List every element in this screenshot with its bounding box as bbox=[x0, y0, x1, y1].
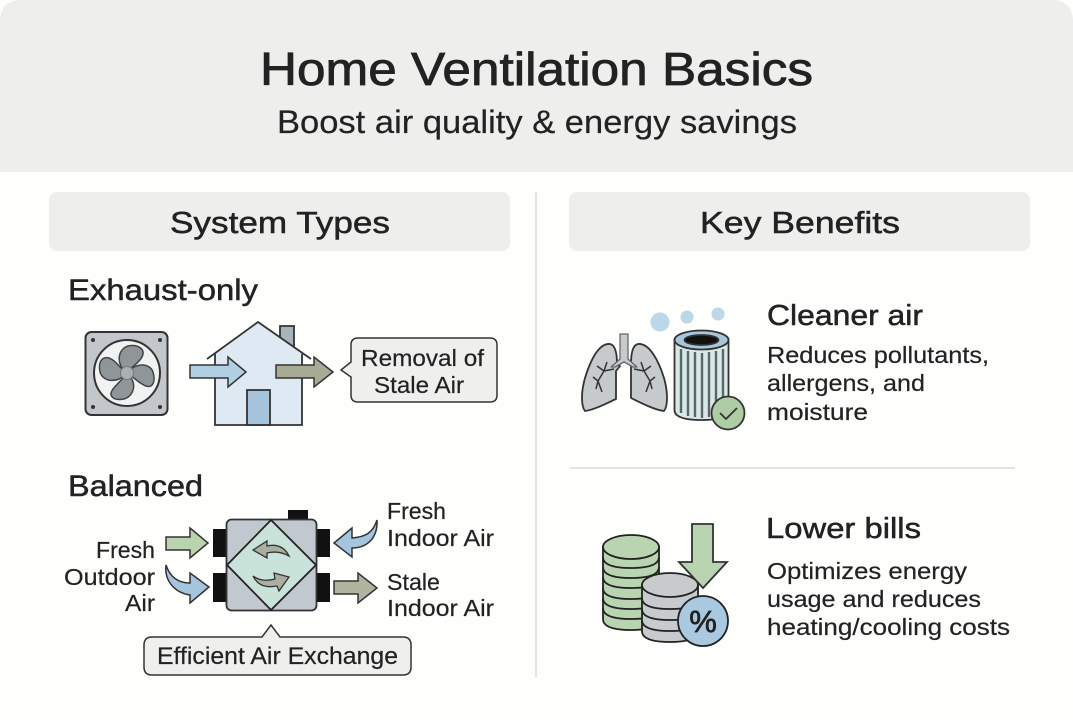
icon: grey coin stack bbox=[642, 573, 698, 642]
arrow: outdoor air curved bbox=[166, 565, 209, 603]
icon: house bbox=[207, 322, 311, 425]
text: lower bills: Lower bills bbox=[766, 513, 921, 545]
arrow: fresh indoor curved bbox=[334, 520, 377, 557]
heading: key benefits bbox=[569, 192, 1030, 251]
text: lower bills bbox=[766, 513, 1010, 640]
heading: system types bbox=[49, 192, 510, 251]
text: cleaner air: moisture bbox=[767, 399, 868, 425]
arrow: air in bbox=[190, 357, 246, 387]
header band bbox=[0, 0, 1073, 172]
arrow: fresh outdoor in bbox=[166, 528, 208, 558]
arrow: stale indoor out bbox=[334, 573, 377, 603]
labels: stale indoor air: Indoor Air bbox=[387, 595, 494, 621]
icon: check badge bbox=[712, 396, 744, 430]
labels: fresh outdoor air: Air bbox=[125, 590, 155, 616]
labels: stale indoor air bbox=[387, 569, 494, 621]
text: cleaner air bbox=[767, 300, 989, 425]
labels: fresh indoor air: Fresh bbox=[387, 498, 446, 524]
title: Home Ventilation Basics bbox=[260, 43, 813, 95]
heading: key benefits: Key Benefits bbox=[700, 205, 900, 240]
text: cleaner air: allergens, and bbox=[767, 370, 925, 396]
icon: bubbles bbox=[650, 308, 724, 332]
text: cleaner air: Reduces pollutants, bbox=[767, 342, 989, 368]
panel: key benefits bbox=[569, 192, 1030, 646]
labels: fresh indoor air bbox=[387, 498, 494, 551]
icon: percent badge: % bbox=[689, 604, 717, 639]
labels: fresh indoor air: Indoor Air bbox=[387, 525, 494, 551]
heading: system types: System Types bbox=[170, 205, 390, 240]
callout: removal of stale air: Removal of bbox=[361, 345, 485, 371]
callout: efficient air exchange: Efficient Air Exchange bbox=[157, 643, 398, 670]
text: lower bills: usage and reduces bbox=[767, 586, 981, 612]
callout: efficient air exchange bbox=[144, 625, 411, 675]
callout: removal of stale air bbox=[341, 338, 497, 402]
subheading: balanced: Balanced bbox=[68, 470, 203, 503]
subheading: exhaust-only: Exhaust-only bbox=[68, 274, 258, 307]
icon: balanced ventilation unit bbox=[213, 510, 330, 610]
labels: fresh outdoor air: Fresh bbox=[96, 537, 155, 563]
icon: air filter bbox=[674, 330, 728, 420]
icon: percent badge bbox=[678, 596, 728, 646]
icon: green coin stack bbox=[603, 535, 659, 630]
subtitle: Boost air quality & energy savings bbox=[277, 104, 797, 140]
labels: fresh outdoor air: Outdoor bbox=[64, 564, 155, 590]
icon: lungs bbox=[582, 334, 667, 411]
labels: stale indoor air: Stale bbox=[387, 569, 440, 595]
text: lower bills: heating/cooling costs bbox=[767, 614, 1010, 640]
callout: removal of stale air: Stale Air bbox=[374, 372, 464, 398]
panel: system types bbox=[49, 192, 510, 675]
text: cleaner air: Cleaner air bbox=[767, 300, 923, 332]
arrow: air out bbox=[276, 357, 333, 387]
labels: fresh outdoor air bbox=[64, 537, 155, 616]
text: lower bills: Optimizes energy bbox=[767, 558, 968, 584]
icon: down arrow bbox=[679, 524, 727, 588]
icon: exhaust fan bbox=[86, 332, 168, 415]
